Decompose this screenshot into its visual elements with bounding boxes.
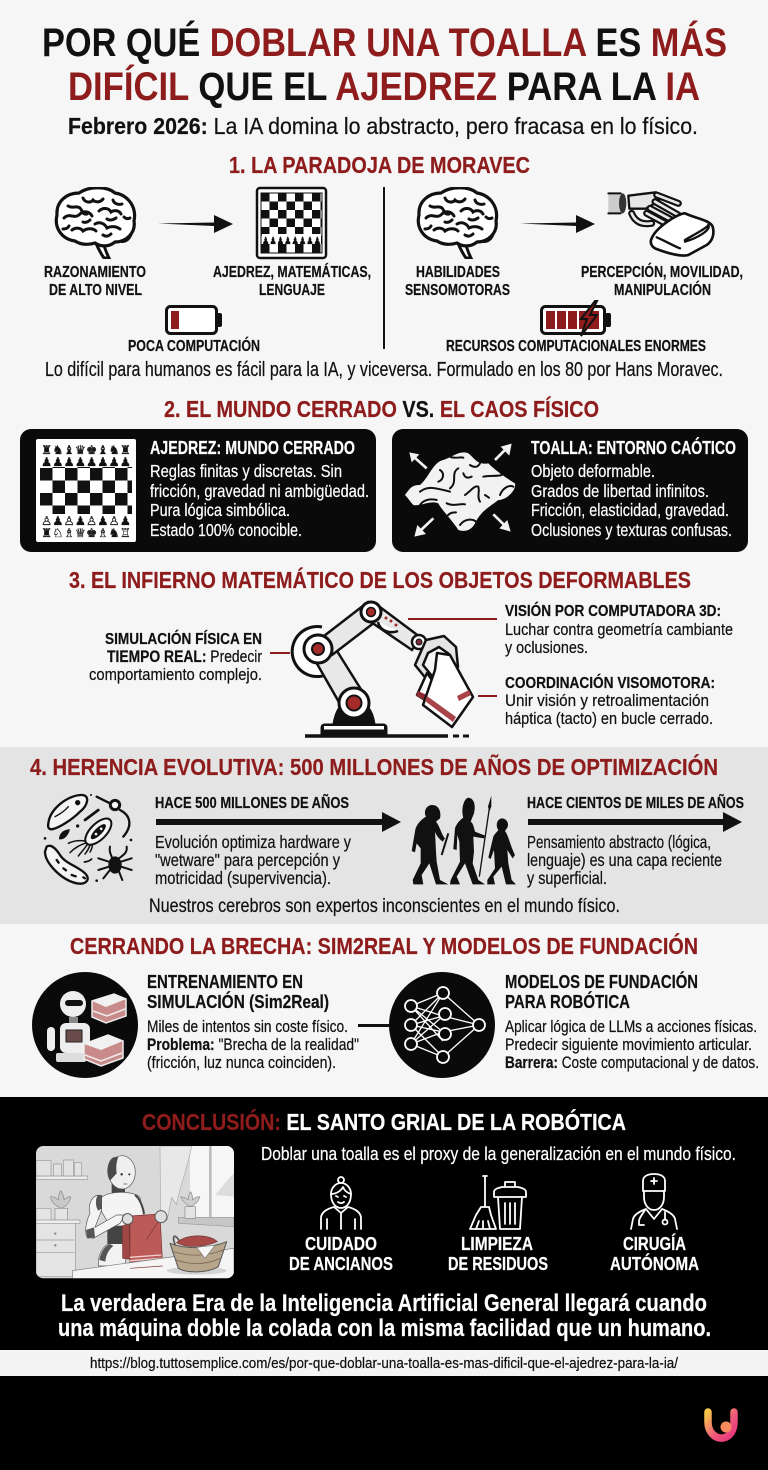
title: POR QUÉ DOBLAR UNA TOALLA ES MÁS [42,20,727,65]
label: cuidado de ancianos: CUIDADO [305,1234,377,1254]
panel: toalla entorno caótico [392,429,748,552]
text: modelos de fundación [505,971,759,1072]
icon: chess board [257,188,326,258]
panel: ajedrez mundo cerrado [20,429,376,552]
label: cirugía autónoma: CIRUGÍA [623,1233,686,1254]
text: coordinación visomotora [505,673,715,728]
icon: broom and trash can [470,1176,526,1229]
connector lines [270,618,497,697]
panel: herencia evolutiva [0,747,768,924]
heading 2: 2. EL MUNDO CERRADO VS. EL CAOS FÍSICO [164,395,599,422]
label: habilidades: SENSOMOTORAS [405,282,510,299]
label: ajedrez: AJEDREZ, MATEMÁTICAS, [213,264,371,281]
text: toalla: Objeto deformable. [531,461,655,481]
text: entrenamiento en simulación: SIMULACIÓN (Sim2Real) [147,991,329,1012]
label: limpieza de residuos: DE RESIDUOS [448,1254,548,1274]
icon: chess board full: ♙♟♙♟♙♟♙♟ [41,514,131,528]
heading 1: 1. LA PARADOJA DE MORAVEC [229,152,530,178]
text: toalla [531,437,736,540]
label: ajedrez: LENGUAJE [259,282,325,299]
text: pensamiento: lenguaje) es una capa reciente [527,850,722,870]
text: simulación física: comportamiento complejo. [89,666,262,684]
icon: full battery [542,301,611,336]
icon: logo [708,1412,734,1438]
label: hace 500 millones: HACE 500 MILLONES DE AÑOS [155,794,349,812]
text: visión por computadora: y oclusiones. [505,639,588,657]
text: entrenamiento en simulación: Problema: "Brecha de la realidad" [147,1036,359,1054]
label: habilidades [405,264,510,299]
label: poca computación: POCA COMPUTACIÓN [128,337,260,355]
text: toalla: Fricción, elasticidad, gravedad. [531,500,729,520]
label: cuidado de ancianos: DE ANCIANOS [289,1254,393,1274]
icon: neural network [389,972,495,1078]
icon: elderly care [321,1177,361,1229]
text: evolución [155,832,351,888]
arrow left [158,215,233,233]
label: limpieza de residuos [448,1234,548,1274]
icon: chess board: ♟♟♟♟♟♟♟♟ [262,236,321,247]
title: DIFÍCIL QUE EL AJEDREZ PARA LA IA [68,64,700,109]
label: ajedrez [213,264,371,299]
text: evolución: Evolución optimiza hardware y [155,832,351,852]
illustration: robot folding towel [36,1146,234,1278]
divider [383,187,385,349]
icon: chess board full: ♟♟♟♟♟♟♟♟ [41,455,131,469]
footer black band [0,1376,768,1470]
text: visión por computadora: Luchar contra geometría cambiante [505,621,733,639]
icon: chess board full: ♜♞♝♛♚♝♞♜ [41,443,131,457]
label: razonamiento [44,264,146,299]
label: cuidado de ancianos [289,1234,393,1274]
source url strip: https://blog.tuttosemplice.com/es/por-que-doblar-una-toalla-es-mas-dificil-que-el-ajedrez-para-la-ia/ [90,1356,679,1372]
subtitle: Febrero 2026: La IA domina lo abstracto, pero fracasa en lo físico. [68,113,698,139]
label: razonamiento: RAZONAMIENTO [44,264,146,281]
icon: surgeon [631,1174,677,1229]
text: coordinación visomotora: COORDINACIÓN VISOMOTORA: [505,673,715,692]
text: pensamiento: y superficial. [527,868,607,888]
label: cirugía autónoma: AUTÓNOMA [610,1253,699,1274]
icon: chess board full [36,439,136,542]
text: ajedrez: Estado 100% conocible. [150,520,302,540]
icon: robot hand on towels [608,192,713,256]
icon: brain right [418,188,497,258]
text: entrenamiento en simulación: (fricción, luz nunca coinciden). [147,1054,336,1072]
text: ajedrez [150,437,369,540]
text: entrenamiento en simulación [147,971,359,1072]
text: pensamiento: Pensamiento abstracto (lógica, [527,832,711,852]
label: limpieza de residuos: LIMPIEZA [461,1234,533,1254]
text: ajedrez: fricción, gravedad ni ambigüedad. [150,481,369,501]
label: razonamiento: DE ALTO NIVEL [49,282,142,299]
icon: brain left [56,188,135,258]
closing statement [58,1290,711,1342]
text: modelos de fundación: PARA ROBÓTICA [505,991,630,1012]
panel: conclusión [0,1097,768,1350]
text: visión por computadora [505,601,733,657]
text: simulación física [89,629,262,684]
text: ajedrez: Reglas finitas y discretas. Sin [150,461,342,481]
icon: human evolution silhouettes [412,796,516,884]
icon: robot arm with towel [292,602,473,736]
arrow right [520,215,595,233]
text: ajedrez: AJEDREZ: MUNDO CERRADO [150,437,355,458]
text: modelos de fundación: MODELOS DE FUNDACIÓN [505,971,698,992]
label: habilidades: HABILIDADES [416,264,500,281]
source url strip [0,1350,768,1376]
text: simulación física: TIEMPO REAL: Predecir [107,648,262,666]
text: evolución: "wetware" para percepción y [155,850,340,870]
text: evolución: motricidad (supervivencia). [155,868,331,888]
text: visión por computadora: VISIÓN POR COMPUTADORA 3D: [505,601,721,620]
icon: low battery [166,306,222,334]
caption: Nuestros cerebros son expertos inconscientes en el mundo físico. [149,896,620,917]
connector [358,1024,392,1027]
heading conclusión: CONCLUSIÓN: EL SANTO GRIAL DE LA ROBÓTICA [142,1108,626,1135]
text: pensamiento [527,832,722,888]
text: ajedrez: Pura lógica simbólica. [150,500,290,520]
icon: microorganisms [44,794,132,884]
text: toalla: Grados de libertad infinitos. [531,481,709,501]
label: percepción: MANIPULACIÓN [614,281,711,299]
text: entrenamiento en simulación: ENTRENAMIENTO EN [147,971,303,992]
text: coordinación visomotora: Unir visión y retroalimentación [505,692,709,710]
arrow: 500 millones [156,812,401,832]
label: percepción [581,263,743,299]
title [42,20,727,109]
icon: robot with towels in circle [32,972,138,1078]
text: entrenamiento en simulación: Miles de intentos sin coste físico. [147,1018,348,1036]
arrow: cientos de miles [528,812,742,832]
icon: chess board full: ♜♘♗♕♚♗♞♖ [41,526,131,540]
text: simulación física: SIMULACIÓN FÍSICA EN [105,629,262,648]
section 1: paradoja de Moravec [44,152,743,381]
label: cirugía autónoma [610,1233,699,1274]
icon: crumpled towel with arrows [405,444,515,537]
text: coordinación visomotora: háptica (tacto) en bucle cerrado. [505,710,713,728]
